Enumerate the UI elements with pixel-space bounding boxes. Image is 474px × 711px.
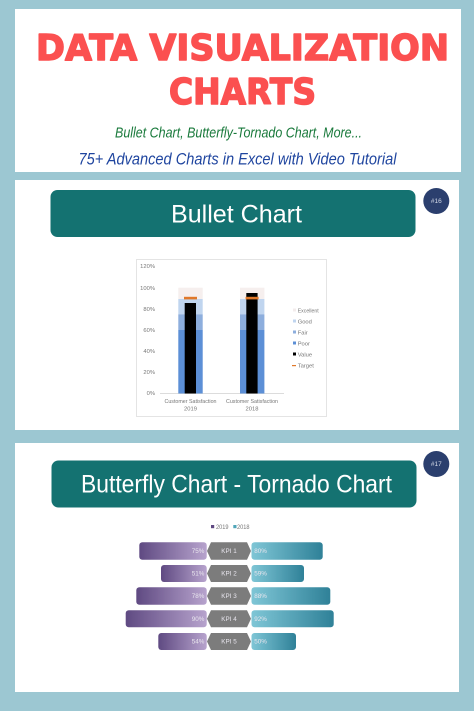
panel: bullet chart <box>15 180 459 430</box>
legend <box>292 308 319 370</box>
row: KPI 3: 88% <box>254 593 267 600</box>
row: KPI 1: KPI 1 <box>221 548 237 555</box>
row: KPI 1 <box>139 542 323 560</box>
row: KPI 1: 80% <box>254 548 267 555</box>
row: KPI 3: KPI 3 <box>221 593 237 600</box>
heading: butterfly chart: Butterfly Chart - Tornado Chart <box>81 471 392 499</box>
butterfly chart <box>126 524 334 650</box>
legend: Poor <box>298 341 310 347</box>
y axis labels: 60% <box>143 328 155 334</box>
legend: Excellent <box>298 308 319 314</box>
legend <box>211 524 250 531</box>
row: KPI 3: 78% <box>192 593 205 600</box>
badge: #16 <box>423 188 449 214</box>
row: KPI 1: 75% <box>192 548 205 555</box>
panel: header <box>15 9 461 172</box>
panel: butterfly chart <box>15 443 459 692</box>
legend: 2018 <box>237 524 250 531</box>
row: KPI 2: 51% <box>192 571 205 578</box>
legend: Good <box>298 319 312 325</box>
legend: 2019 <box>216 524 229 531</box>
y axis labels <box>140 264 155 397</box>
x axis labels <box>164 399 278 412</box>
heading: butterfly chart <box>52 460 416 508</box>
row: KPI 2: KPI 2 <box>221 571 237 578</box>
legend: Target <box>298 364 314 370</box>
badge: #17: #17 <box>431 461 442 468</box>
x axis labels: Customer Satisfaction <box>226 399 278 405</box>
x axis labels: Customer Satisfaction <box>164 399 216 405</box>
bullet chart <box>136 260 326 416</box>
legend: Value <box>298 352 312 358</box>
y axis labels: 0% <box>147 391 155 397</box>
row: KPI 2: 59% <box>254 571 267 578</box>
row: KPI 2 <box>161 565 304 582</box>
row: KPI 4 <box>126 610 334 627</box>
y axis labels: 40% <box>143 349 155 355</box>
row: KPI 4: 90% <box>192 616 205 623</box>
row: KPI 5: 54% <box>192 639 205 646</box>
row: KPI 3 <box>136 587 330 605</box>
x axis labels: 2018 <box>246 406 258 412</box>
y axis labels: 20% <box>143 370 155 376</box>
heading: bullet chart <box>50 190 416 237</box>
row: KPI 4: KPI 4 <box>221 616 237 623</box>
title: CHARTS <box>169 72 316 113</box>
title <box>36 28 449 113</box>
y axis labels: 120% <box>140 264 155 270</box>
subtitle: chart list: Bullet Chart, Butterfly-Tornado Chart, More... <box>115 124 362 142</box>
row: KPI 5: KPI 5 <box>221 639 237 646</box>
bar: 2019 <box>178 288 203 394</box>
bar: 2018 <box>240 288 264 394</box>
legend: Fair <box>298 330 308 336</box>
row: KPI 5: 50% <box>254 639 267 646</box>
badge: #17 <box>423 451 449 477</box>
subtitle: advanced charts: 75+ Advanced Charts in Excel with Video Tutorial <box>78 150 398 168</box>
row: KPI 5 <box>158 633 296 650</box>
y axis labels: 100% <box>140 286 155 292</box>
badge: #16: #16 <box>431 198 442 205</box>
y axis labels: 80% <box>143 307 155 313</box>
heading: bullet chart: Bullet Chart <box>171 201 302 229</box>
row: KPI 4: 92% <box>254 616 267 623</box>
x axis labels: 2019 <box>184 406 197 412</box>
title: DATA VISUALIZATION <box>36 28 449 69</box>
